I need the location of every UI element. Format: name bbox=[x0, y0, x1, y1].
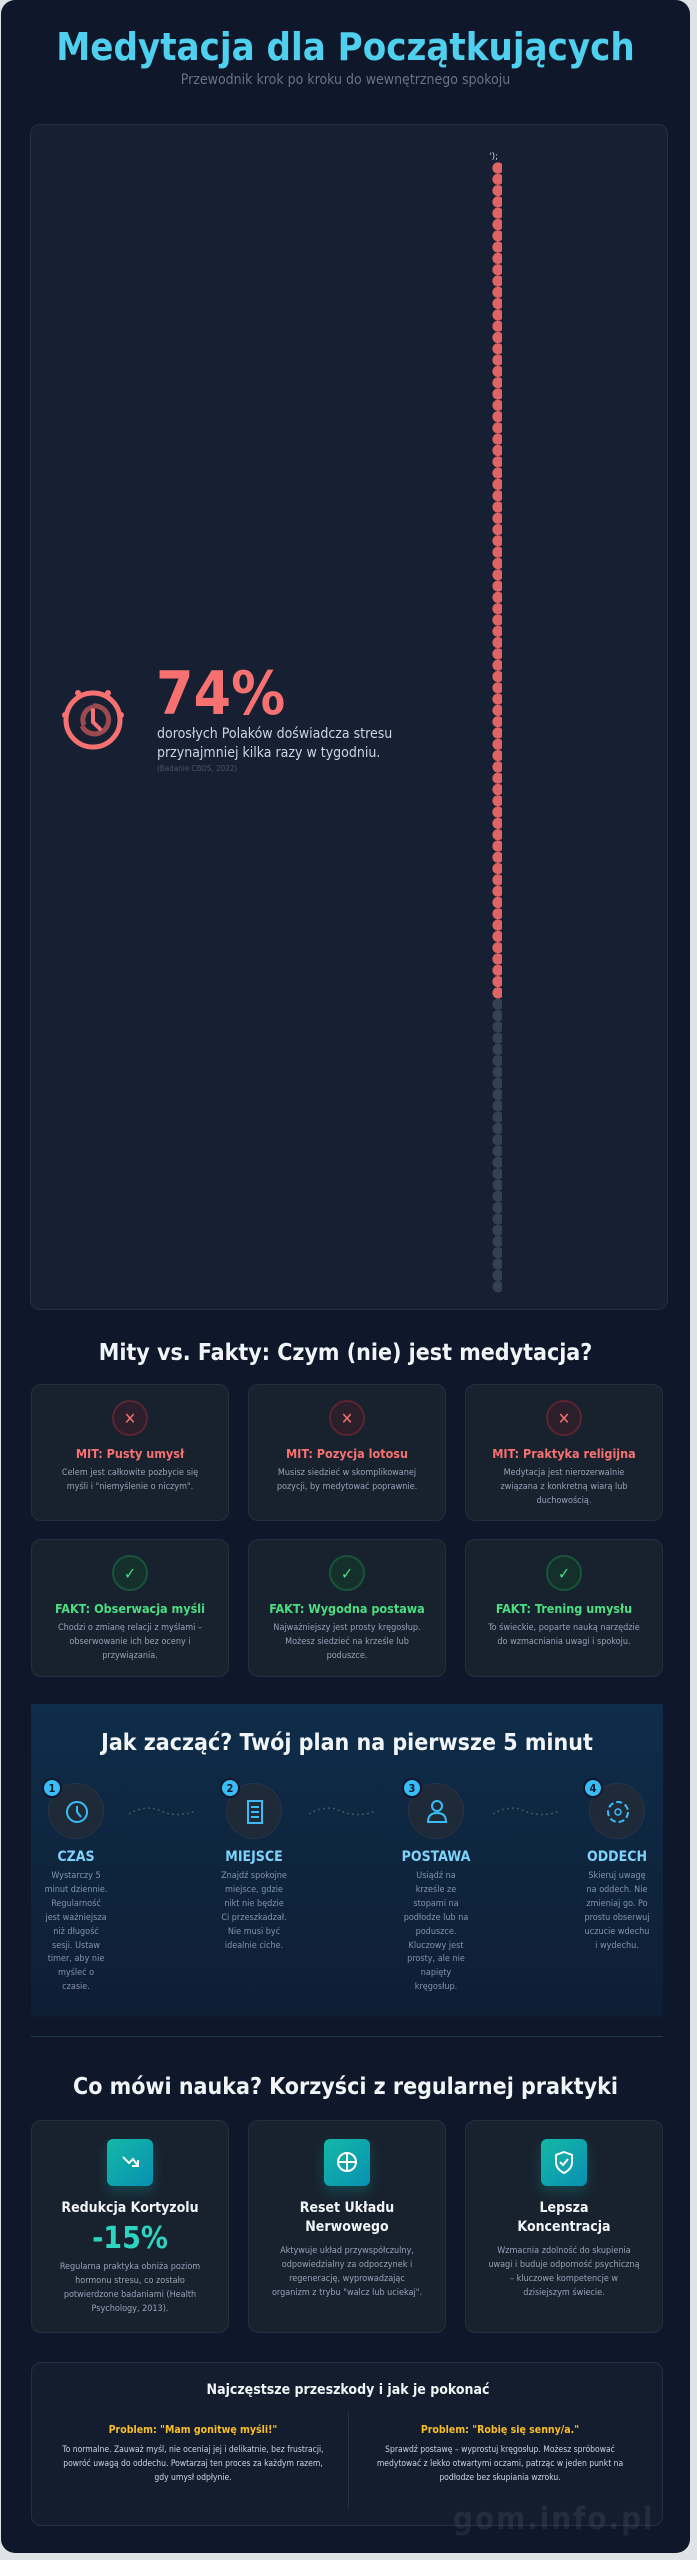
stat: 74%: 74% bbox=[156, 659, 285, 729]
icon: x bbox=[329, 1400, 365, 1436]
myth title: MIT: Pozycja lotosu bbox=[286, 1446, 408, 1461]
benefit stat: -15% bbox=[92, 2221, 168, 2256]
connectors bbox=[128, 1807, 558, 1816]
watermark: gom.info.pl bbox=[453, 2501, 655, 2537]
problem 1: To normalne. Zauważ myśl, nie oceniaj jej i delikatnie, bez frustracji, powróć uwagą do oddechu. Powtarzaj ten proces za każdym razem, gdy umysł odpłynie. bbox=[62, 2445, 324, 2483]
panel: fact 1 bbox=[31, 1539, 229, 1677]
benefit text: Regularna praktyka obniża poziom hormonu stresu, co zostało potwierdzone badaniami (Health Psychology, 2013). bbox=[60, 2262, 200, 2314]
panel: myth 1 bbox=[31, 1384, 229, 1521]
panel: fact 2 bbox=[248, 1539, 446, 1677]
stat description bbox=[157, 726, 392, 761]
step 3: posture: POSTAWA bbox=[402, 1849, 470, 1865]
step 1: time bbox=[42, 1778, 107, 1992]
icon: check bbox=[112, 1555, 148, 1591]
benefit title: Lepsza Koncentracja bbox=[517, 2200, 611, 2235]
step 2: place bbox=[220, 1778, 287, 1951]
step 2: place: MIEJSCE bbox=[225, 1849, 283, 1865]
heading: Jak zacząć? Twój plan na pierwsze 5 minut bbox=[101, 1730, 593, 1756]
step 1: time: Wystarczy 5 minut dziennie. Regularność jest ważniejsza niż długość sesji. Ustaw timer, aby nie myśleć o czasie. bbox=[45, 1871, 107, 1992]
icon: stopwatch bbox=[62, 690, 124, 750]
problem 2: Sprawdź postawę – wyprostuj kręgosłup. Możesz spróbować medytować z lekko otwartymi oczami, patrząc w jeden punkt na podłodze bez skupiania wzroku. bbox=[377, 2445, 623, 2483]
panel: stress statistic bbox=[30, 124, 668, 1310]
panel: fact 3 bbox=[465, 1539, 663, 1677]
benefit text: Aktywuje układ przywspółczulny, odpowiedzialny za odpoczynek i regenerację, wyprowadzając organizm z trybu "walcz lub uciekaj". bbox=[272, 2246, 422, 2298]
panel: benefit nervous system bbox=[248, 2120, 446, 2333]
panel: myth 3 bbox=[465, 1384, 663, 1521]
fact title: FAKT: Wygodna postawa bbox=[269, 1601, 425, 1616]
icon: check bbox=[546, 1555, 582, 1591]
icon: x: ✕ bbox=[558, 1409, 570, 1428]
panel: obstacles bbox=[31, 2362, 663, 2526]
benefit title: Reset Układu Nerwowego bbox=[300, 2200, 394, 2235]
myth title: MIT: Pusty umysł bbox=[76, 1446, 184, 1461]
fact text: To świeckie, poparte nauką narzędzie do wzmacniania uwagi i spokoju. bbox=[488, 1623, 640, 1647]
icon: check: ✓ bbox=[558, 1564, 570, 1583]
stat description: dorosłych Polaków doświadcza stresu bbox=[157, 726, 392, 742]
step 4: breath: 4 bbox=[590, 1782, 596, 1795]
step 2: place: Znajdź spokojne miejsce, gdzie nikt nie będzie Ci przeszkadzał. Nie musi być idealnie ciche. bbox=[221, 1871, 287, 1951]
subtitle: Przewodnik krok po kroku do wewnętrznego spokoju bbox=[181, 72, 510, 88]
stat description: przynajmniej kilka razy w tygodniu. bbox=[157, 745, 380, 761]
myth text: Medytacja jest nierozerwalnie związana z konkretną wiarą lub duchowością. bbox=[500, 1468, 628, 1506]
myth title: MIT: Praktyka religijna bbox=[492, 1446, 636, 1461]
icon: trend down bbox=[107, 2139, 153, 2186]
icon: x: ✕ bbox=[124, 1409, 136, 1428]
problem 2 bbox=[377, 2424, 623, 2483]
dot column chart bbox=[489, 152, 502, 1292]
icon: check: ✓ bbox=[124, 1564, 136, 1583]
icon: check: ✓ bbox=[341, 1564, 353, 1583]
panel: benefit cortisol bbox=[31, 2120, 229, 2333]
benefit title: Redukcja Kortyzolu bbox=[61, 2200, 199, 2216]
icon: x bbox=[546, 1400, 582, 1436]
step 1: time: CZAS bbox=[57, 1849, 95, 1865]
heading: benefits: Co mówi nauka? Korzyści z regularnej praktyki bbox=[73, 2074, 618, 2100]
icon: x: ✕ bbox=[341, 1409, 353, 1428]
title: Medytacja dla Początkujących bbox=[56, 25, 635, 69]
step 4: breath: Skieruj uwagę na oddech. Nie zmieniaj go. Po prostu obserwuj uczucie wdechu i wydechu. bbox=[585, 1871, 649, 1951]
myth text: Musisz siedzieć w skomplikowanej pozycji, by medytować poprawnie. bbox=[277, 1468, 417, 1492]
fact text: Chodzi o zmianę relacji z myślami – obserwowanie ich bez oceny i przywiązania. bbox=[58, 1623, 202, 1661]
step 1: time: 1 bbox=[49, 1782, 55, 1795]
icon: shield bbox=[541, 2139, 587, 2186]
step 3: posture bbox=[402, 1778, 470, 1992]
icon: x bbox=[112, 1400, 148, 1436]
problem 2: Problem: "Robię się senny/a." bbox=[421, 2424, 579, 2436]
heading: myths vs facts: Mity vs. Fakty: Czym (nie) jest medytacja? bbox=[99, 1340, 592, 1366]
fact title: FAKT: Obserwacja myśli bbox=[55, 1601, 205, 1616]
problem 1 bbox=[62, 2424, 324, 2483]
benefit text: Wzmacnia zdolność do skupienia uwagi i buduje odporność psychiczną – kluczowe kompetencje w dzisiejszym świecie. bbox=[488, 2246, 640, 2298]
step 3: posture: 3 bbox=[409, 1782, 415, 1795]
step 3: posture: Usiądź na krześle ze stopami na podłodze lub na poduszce. Kluczowy jest prosty, ale nie napięty kręgosłup. bbox=[404, 1871, 468, 1992]
heading: Najczęstsze przeszkody i jak je pokonać bbox=[207, 2382, 489, 2398]
panel: 5-minute plan bbox=[31, 1704, 663, 2017]
icon: check bbox=[329, 1555, 365, 1591]
step 4: breath bbox=[583, 1778, 649, 1951]
divider bbox=[348, 2411, 349, 2508]
fact text: Najważniejszy jest prosty kręgosłup. Możesz siedzieć na krześle lub poduszce. bbox=[273, 1623, 421, 1661]
icon: reset bbox=[324, 2139, 370, 2186]
step 4: breath: ODDECH bbox=[587, 1849, 647, 1865]
panel: benefit focus bbox=[465, 2120, 663, 2333]
fact title: FAKT: Trening umysłu bbox=[496, 1601, 632, 1616]
source: (Badanie CBOS, 2022) bbox=[157, 764, 237, 773]
problem 1: Problem: "Mam gonitwę myśli!" bbox=[109, 2424, 277, 2436]
panel: myth 2 bbox=[248, 1384, 446, 1521]
step 2: place: 2 bbox=[227, 1782, 233, 1795]
myth text: Celem jest całkowite pozbycie się myśli i "niemyślenie o niczym". bbox=[62, 1468, 198, 1492]
